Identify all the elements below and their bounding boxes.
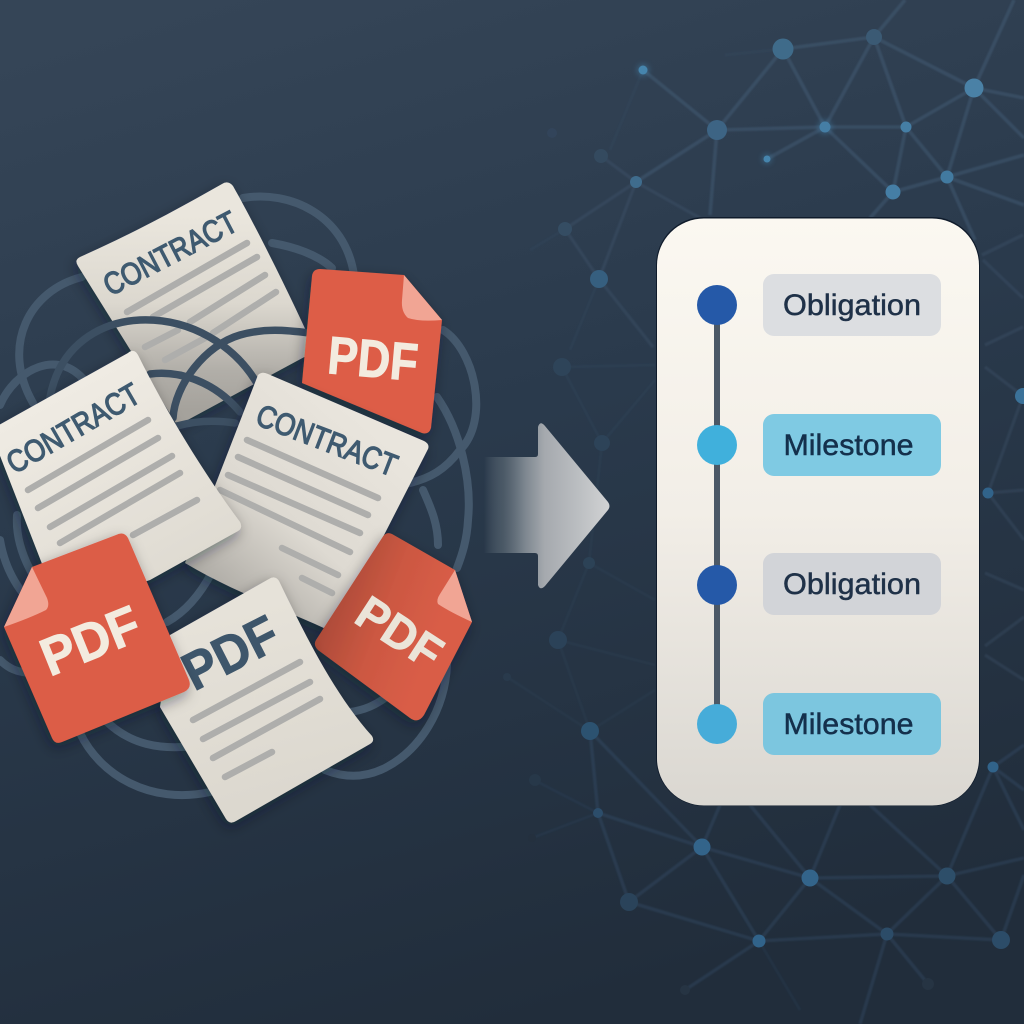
document: red PDF right [315, 533, 472, 720]
arrow pointing right [484, 423, 610, 588]
row: obligation 2 [697, 553, 941, 615]
threads over top contract [50, 320, 310, 426]
row: milestone 2: Milestone [784, 708, 914, 741]
text lines [193, 662, 320, 777]
row: milestone 1 [697, 414, 941, 476]
document: red PDF left [4, 534, 190, 743]
network nodes lower [528, 722, 1010, 995]
PDF label: PDF [347, 585, 453, 680]
contract label: CONTRACT [251, 398, 402, 483]
timeline spine [714, 305, 720, 724]
document: centre contract sheet [185, 373, 428, 630]
network nodes upper [503, 29, 1024, 681]
row: obligation 1: Obligation [783, 289, 921, 322]
PDF label: PDF [325, 326, 420, 393]
contract label: CONTRACT [0, 376, 146, 481]
text lines [28, 420, 197, 543]
row: obligation 1 [697, 274, 941, 336]
timeline card [656, 217, 980, 806]
text lines [127, 243, 276, 360]
row: milestone 1: Milestone [784, 429, 914, 462]
PDF label: PDF [173, 604, 289, 702]
document: bottom PDF sheet [160, 577, 373, 823]
row: milestone 2 [697, 693, 941, 755]
document: left contract sheet [0, 351, 241, 610]
network glow halos [637, 64, 832, 164]
page fold [437, 570, 472, 622]
network graph background [503, 0, 1024, 1024]
contract label: CONTRACT [97, 204, 243, 303]
PDF label: PDF [32, 595, 149, 688]
page fold [4, 567, 48, 627]
text lines [220, 440, 378, 593]
document: top contract sheet [76, 182, 309, 424]
document: red PDF top [302, 269, 442, 433]
tangled threads behind documents [0, 197, 476, 795]
row: obligation 2: Obligation [783, 568, 921, 601]
page fold [402, 275, 442, 321]
